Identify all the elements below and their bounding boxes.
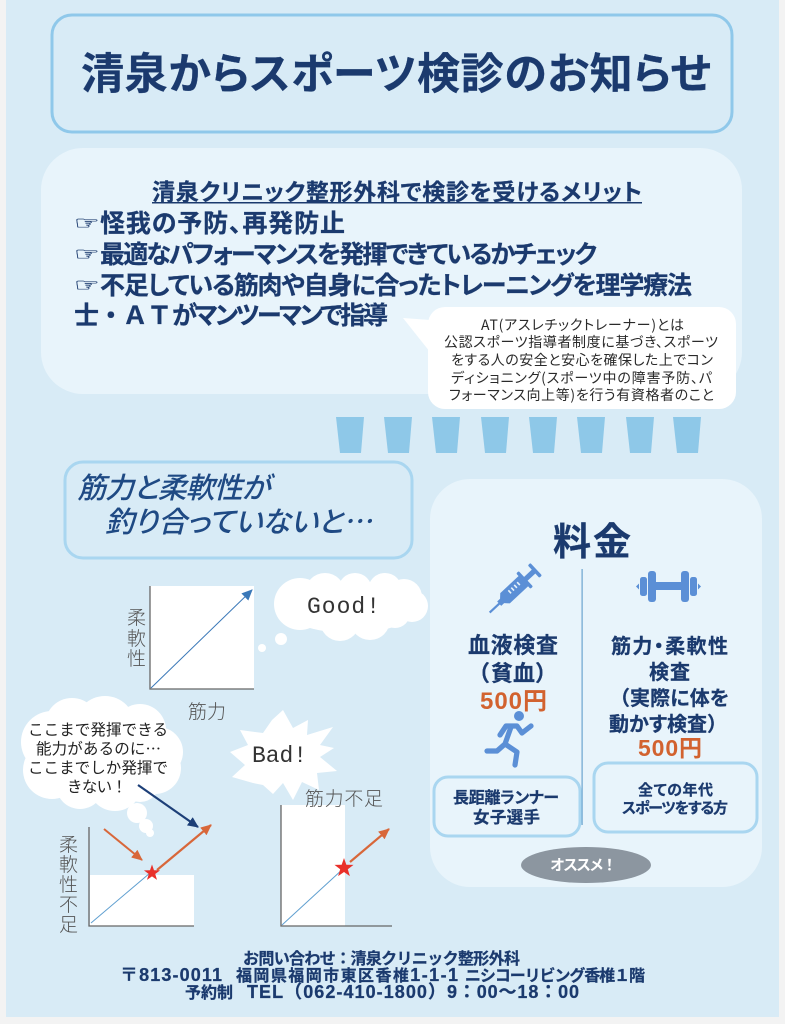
thought cloud: Good <box>258 573 428 652</box>
orange arrow: limit <box>104 829 142 860</box>
badge: recommended <box>521 847 651 883</box>
contact info: 9：00～18：00 <box>447 982 579 1002</box>
badge: recommended: オススメ！ <box>550 857 617 874</box>
merits heading: 清泉クリニック整形外科で検診を受けるメリット <box>152 179 642 205</box>
contact info <box>120 949 645 1002</box>
y-axis label <box>59 830 78 937</box>
blood test price: 500円 <box>480 688 547 715</box>
y-axis label: 性 <box>59 870 78 897</box>
blood test label: 血液検査 <box>468 633 558 658</box>
audience box: runners: 女子選手 <box>473 807 540 827</box>
arrow: downward bars <box>336 417 701 453</box>
merit list: 士・ＡＴ <box>74 302 172 330</box>
title <box>52 15 732 132</box>
contact info: ニシコーリビング香椎１階 <box>465 966 645 985</box>
icon: dumbbell <box>636 571 701 602</box>
contact info: お問い合わせ：清泉クリニック整形外科 <box>243 949 520 968</box>
strength test label: 動かす検査 <box>609 713 707 736</box>
fees heading: 料金 <box>553 522 631 564</box>
star marker <box>334 858 354 876</box>
strength test price: 500円 <box>638 735 702 761</box>
thought cloud: Good: Good! <box>307 594 380 620</box>
contact info: 福岡県福岡市東区香椎1-1-1 <box>236 965 458 985</box>
y-axis label: 性 <box>127 644 146 671</box>
merit list: ☞ <box>74 213 100 233</box>
contact info: 〒813-0011 <box>120 965 222 985</box>
burst: Bad: Bad! <box>252 743 307 769</box>
merit list: がマンツーマンで指導 <box>172 301 388 330</box>
heading: balance <box>65 462 412 558</box>
audience box: runners <box>434 777 580 836</box>
heading: balance: 筋力と柔軟性が <box>77 465 276 507</box>
callout: AT definition <box>403 307 736 409</box>
chart heading: 筋力不足 <box>305 784 383 811</box>
merit list: ☞ <box>74 275 100 295</box>
audience box: all ages: 全ての年代 <box>638 781 713 799</box>
burst: Bad <box>230 710 337 800</box>
blood test label: 貧血 <box>491 661 535 686</box>
blood test label: （ <box>468 661 490 686</box>
audience box: all ages <box>594 763 757 832</box>
star marker <box>144 864 160 880</box>
y-axis label: 不 <box>59 890 78 917</box>
y-axis label: 柔 <box>59 830 78 857</box>
icon: runner <box>487 711 531 765</box>
thought cloud: capability: ここまでしか発揮で <box>28 756 168 778</box>
chart: lacking strength <box>281 784 392 926</box>
y-axis label: 軟 <box>127 624 146 651</box>
merit list: 不足している筋肉や自身に合ったトレーニングを理学療法 <box>100 271 692 300</box>
audience box: all ages: スポーツをする方 <box>622 799 728 817</box>
thought cloud: capability: きない！ <box>67 775 127 797</box>
audience box: runners: 長距離ランナー <box>453 789 559 807</box>
merit list: 怪我の予防、再発防止 <box>100 210 345 238</box>
callout: AT definition: をする人の安全と安心を確保した上でコン <box>451 350 713 370</box>
contact info: TEL（062-410-1800） <box>247 982 446 1002</box>
merit list: ☞ <box>74 244 100 264</box>
panel: fees <box>430 479 762 887</box>
merit list <box>74 210 692 330</box>
title: 清泉からスポーツ検診のお知らせ <box>81 51 711 99</box>
blood test label <box>468 633 558 686</box>
thought cloud: capability <box>21 696 183 837</box>
y-axis label: 軟 <box>59 850 78 877</box>
callout: AT definition: フォーマンス向上等)を行う有資格者のこと <box>449 385 714 405</box>
strength test label <box>609 635 729 736</box>
strength test label: （ <box>610 687 630 710</box>
contact info: 予約制 <box>185 984 233 1002</box>
y-axis label: 柔 <box>127 603 146 630</box>
arrow: navy pointer <box>138 785 198 827</box>
callout: AT definition: AT(アスレチックトレーナー)とは <box>481 315 684 335</box>
thought cloud: capability: ここまで発揮できる <box>28 718 168 740</box>
callout: AT definition: 公認スポーツ指導者制度に基づき、スポーツ <box>444 332 718 352</box>
x-axis label: 筋力 <box>188 697 226 724</box>
orange arrow: potential <box>157 825 211 870</box>
strength test label: ） <box>707 713 727 736</box>
strength test label: 実際に体を <box>630 687 729 710</box>
blood test label: ） <box>535 661 557 686</box>
callout: AT definition: ディショニング(スポーツ中の障害予防、パ <box>451 368 712 388</box>
strength test label: 筋力・柔軟性 <box>611 635 728 658</box>
icon: syringe <box>483 561 543 620</box>
chart: lacking flexibility <box>59 825 211 937</box>
thought cloud: capability: 能力があるのに… <box>36 737 161 759</box>
chart: good balance <box>127 586 254 724</box>
heading: balance: 釣り合っていないと… <box>105 499 373 541</box>
strength test label: 検査 <box>649 661 690 684</box>
panel: merits <box>41 148 742 394</box>
orange arrow <box>350 829 389 862</box>
y-axis label: 足 <box>59 910 78 937</box>
merit list: 最適なパフォーマンスを発揮できているかチェック <box>100 241 597 269</box>
y-axis label <box>127 603 146 671</box>
